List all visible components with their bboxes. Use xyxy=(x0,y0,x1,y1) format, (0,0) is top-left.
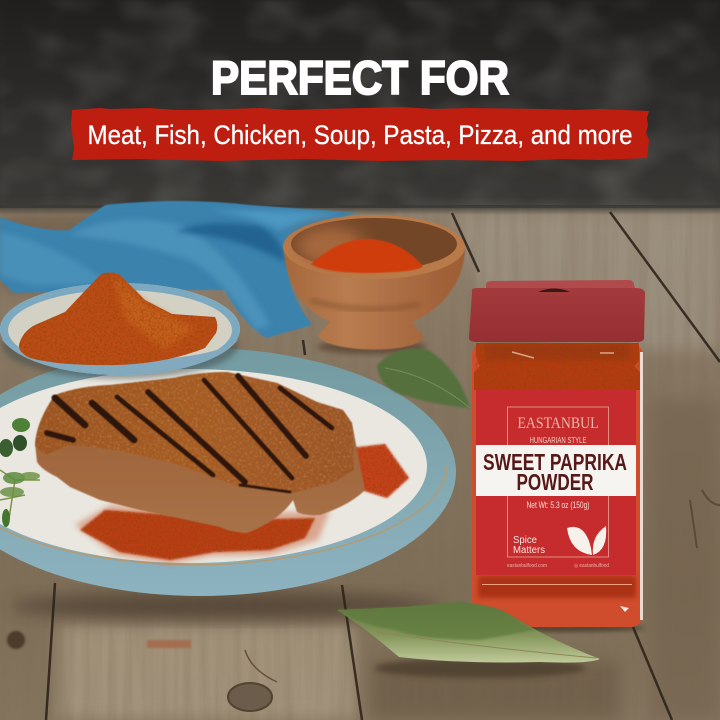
small plate with paprika powder xyxy=(0,272,240,379)
tagline: Spice xyxy=(513,535,537,546)
style line: HUNGARIAN STYLE xyxy=(530,436,586,445)
wooden bowl with paprika xyxy=(283,215,465,354)
jar label: POWDER xyxy=(516,469,594,495)
brand logo xyxy=(512,412,602,436)
white name band xyxy=(476,445,636,496)
jar body xyxy=(472,343,645,632)
jar label: EASTANBUL xyxy=(518,415,598,432)
jar cap xyxy=(469,280,645,342)
paprika dust under steak xyxy=(75,444,409,564)
website: eastanbulfood.com xyxy=(507,563,547,569)
spice jar: sweet paprika powder xyxy=(469,280,645,632)
bay leaf near bowl xyxy=(377,349,470,408)
heading: PERFECT FOR xyxy=(211,51,509,104)
jar label xyxy=(476,390,636,575)
social handle: ◎ eastanbulfood xyxy=(574,563,609,569)
dinner plate with steak xyxy=(0,348,456,596)
banner text: Meat, Fish, Chicken, Soup, Pasta, Pizza, and more xyxy=(88,120,632,150)
plate xyxy=(0,348,456,596)
icon: leaves xyxy=(567,526,606,555)
background: wooden table xyxy=(0,205,720,720)
grilled steak xyxy=(35,372,365,533)
jar label: Matters xyxy=(513,545,545,556)
background: dark wall xyxy=(0,0,720,212)
net weight: Net Wt: 5.3 oz (150g) xyxy=(526,500,590,510)
paprika mound xyxy=(19,272,217,365)
red banner xyxy=(71,107,649,161)
thyme sprig xyxy=(0,418,40,527)
bay leaf in foreground xyxy=(337,602,600,678)
blue cloth xyxy=(0,201,358,338)
product name: SWEET PAPRIKA xyxy=(483,449,627,475)
grill marks xyxy=(47,376,332,492)
